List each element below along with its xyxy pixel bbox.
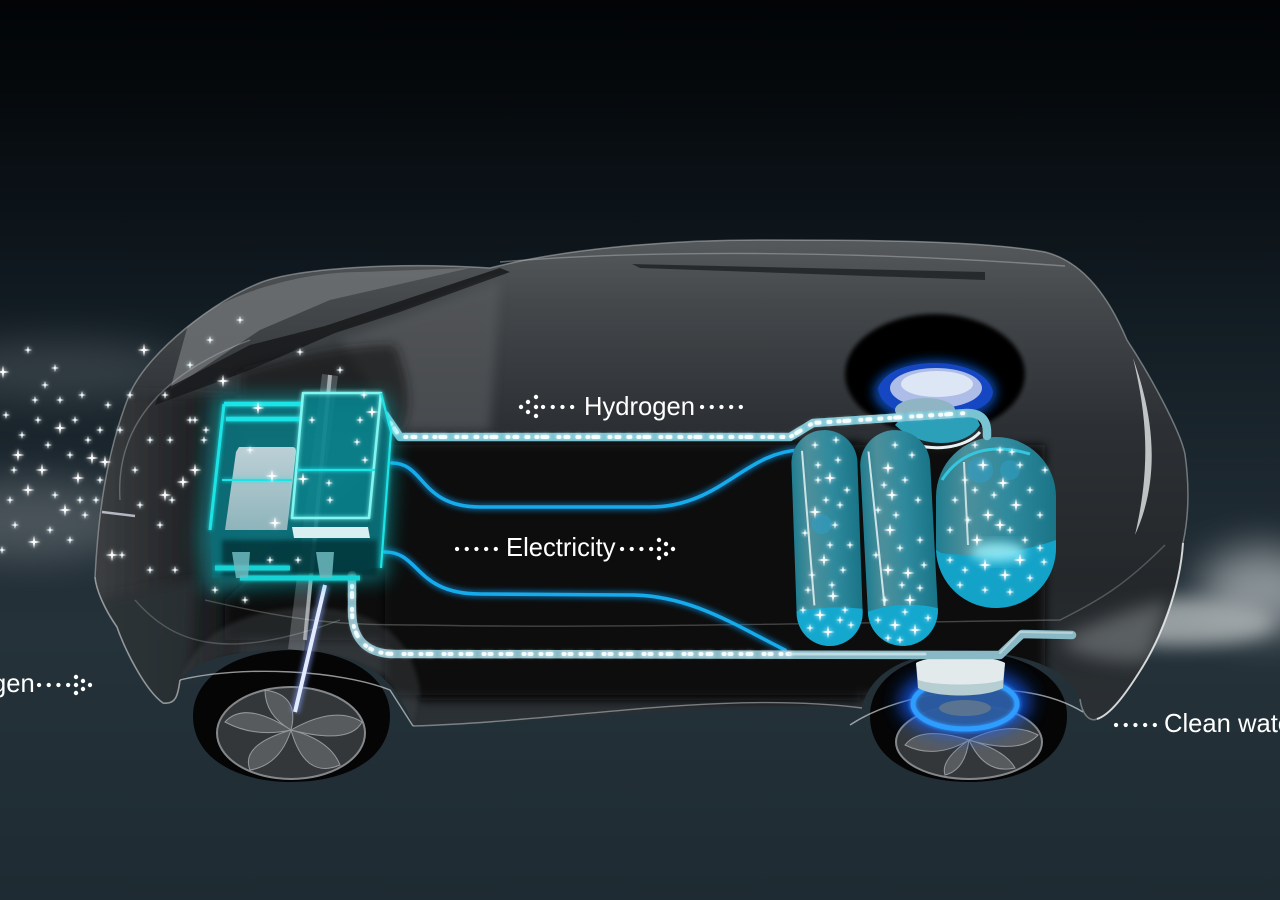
front body shade bbox=[95, 390, 240, 666]
tanks bbox=[790, 428, 1056, 648]
label: hydrogen: Hydrogen bbox=[584, 393, 695, 421]
roof rail bbox=[632, 264, 985, 280]
left air haze bbox=[0, 340, 190, 560]
tank 2 bbox=[858, 428, 940, 648]
light cabin wash bbox=[340, 280, 500, 430]
exhaust steam bbox=[1085, 548, 1280, 646]
label: hydrogen bbox=[519, 393, 743, 421]
windshield bbox=[170, 268, 470, 390]
sparkles: tanks bbox=[799, 436, 1049, 644]
hydrogen pipe lower bbox=[352, 575, 1072, 655]
rear light panel bbox=[1133, 358, 1152, 535]
label: electricity: Electricity bbox=[506, 534, 616, 562]
label: partial oxygen bbox=[0, 670, 92, 698]
tank 3 bbox=[936, 437, 1056, 608]
car shell translucent fill bbox=[80, 235, 1190, 740]
lower front translucent bbox=[102, 584, 192, 702]
tank 1 bbox=[790, 429, 864, 647]
rear steam inside shell bbox=[1060, 600, 1170, 661]
upper motor bbox=[873, 360, 997, 448]
lower motor bbox=[900, 656, 1030, 736]
rear wheel bbox=[870, 652, 1067, 782]
fender lines bbox=[135, 545, 1165, 726]
car outline bbox=[95, 240, 1188, 720]
hydrogen pipe upper bbox=[385, 413, 987, 437]
a-pillar dark band bbox=[155, 268, 510, 405]
intake beam bbox=[295, 375, 330, 712]
fender panels bbox=[186, 607, 420, 706]
front upper wheel shadow bbox=[240, 345, 408, 432]
sparkles: engine bay bbox=[106, 316, 378, 604]
dark lower cabin bbox=[225, 443, 860, 700]
label: electricity bbox=[457, 534, 675, 562]
coolant block bbox=[225, 447, 296, 530]
fuel cell bolts bbox=[232, 552, 334, 578]
front wheel bbox=[193, 650, 390, 782]
spare wheel bbox=[845, 314, 1025, 434]
fuel cell stack bbox=[198, 393, 396, 592]
sparkles: incoming air bbox=[0, 346, 112, 554]
electricity lines bbox=[385, 450, 800, 650]
